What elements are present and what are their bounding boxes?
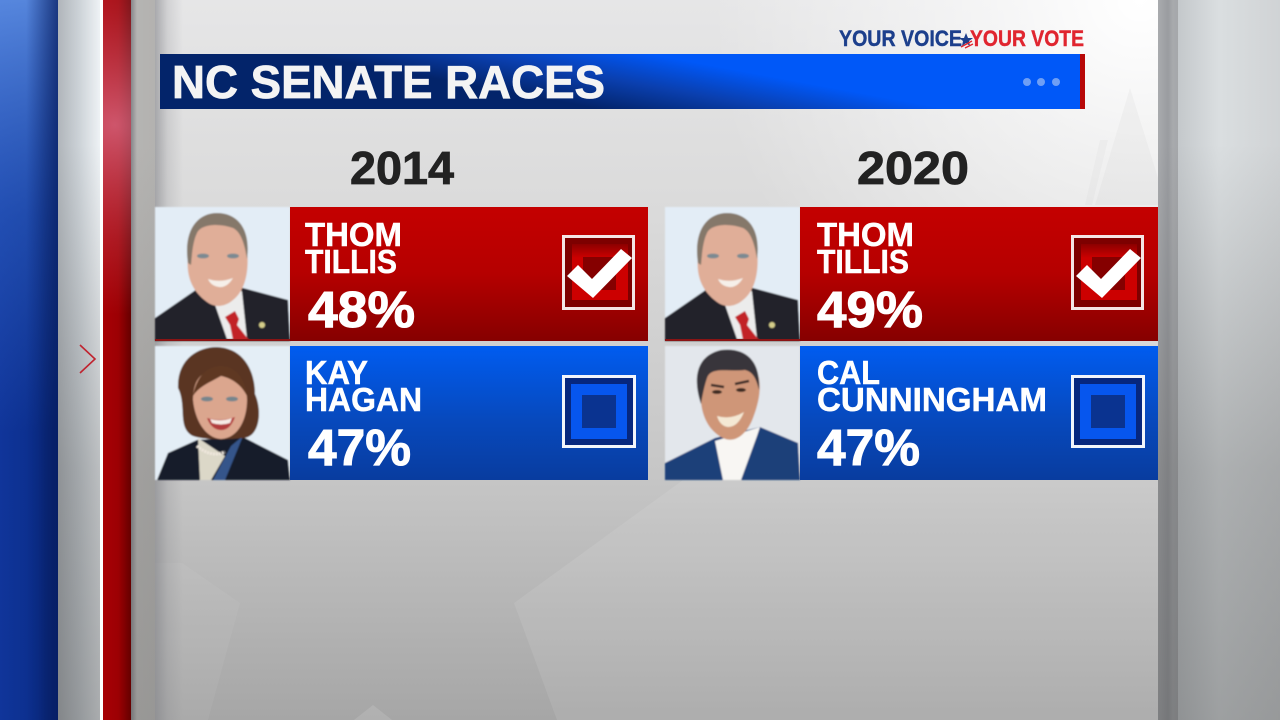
photo: Thom Tillis [665,207,800,341]
heading: 2014: 2014 [350,142,454,194]
right decorative stripes [1158,0,1280,720]
photo: Thom Tillis [155,207,290,341]
card: Tillis result [290,207,648,341]
icon: empty box [1072,376,1144,446]
candidate name: THOM [817,216,914,253]
title bar [160,54,1085,109]
panel: 2020 Thom Tillis [665,207,1158,341]
icon: checked box [1072,236,1142,308]
photo: Kay Hagan [155,346,290,480]
heading: NC SENATE RACES [172,56,605,108]
candidate name: TILLIS [305,243,397,280]
vote share: 48% [308,281,415,338]
vote share: 47% [817,419,920,476]
candidate name: TILLIS [817,243,909,280]
card: Hagan result [290,346,648,480]
vote share: 47% [308,419,411,476]
candidate name: THOM [305,216,402,253]
panel: 2014 Thom Tillis [155,207,648,341]
left decorative stripes [0,0,155,720]
panel: 2014 Kay Hagan [155,346,648,480]
logo: Your Voice Your Vote: YOUR VOICE [839,26,962,51]
card: Cunningham result [800,346,1158,480]
icon: checked box [564,236,634,308]
icon: empty box [564,376,634,446]
heading: 2020: 2020 [857,142,969,194]
candidate name: CAL [817,354,880,391]
icon: chevron arrow [80,345,95,373]
logo: Your Voice Your Vote: YOUR VOTE [970,26,1084,51]
card: Tillis result [800,207,1158,341]
candidate name: HAGAN [305,381,422,418]
panel: 2020 Cal Cunningham [665,346,1158,480]
candidate name: KAY [305,354,368,391]
candidate name: CUNNINGHAM [817,381,1047,418]
photo: Cal Cunningham [665,346,800,480]
logo: Your Voice Your Vote [839,26,1084,51]
background panel [155,0,1158,720]
vote share: 49% [817,281,923,338]
icon: three dots [1023,78,1060,86]
